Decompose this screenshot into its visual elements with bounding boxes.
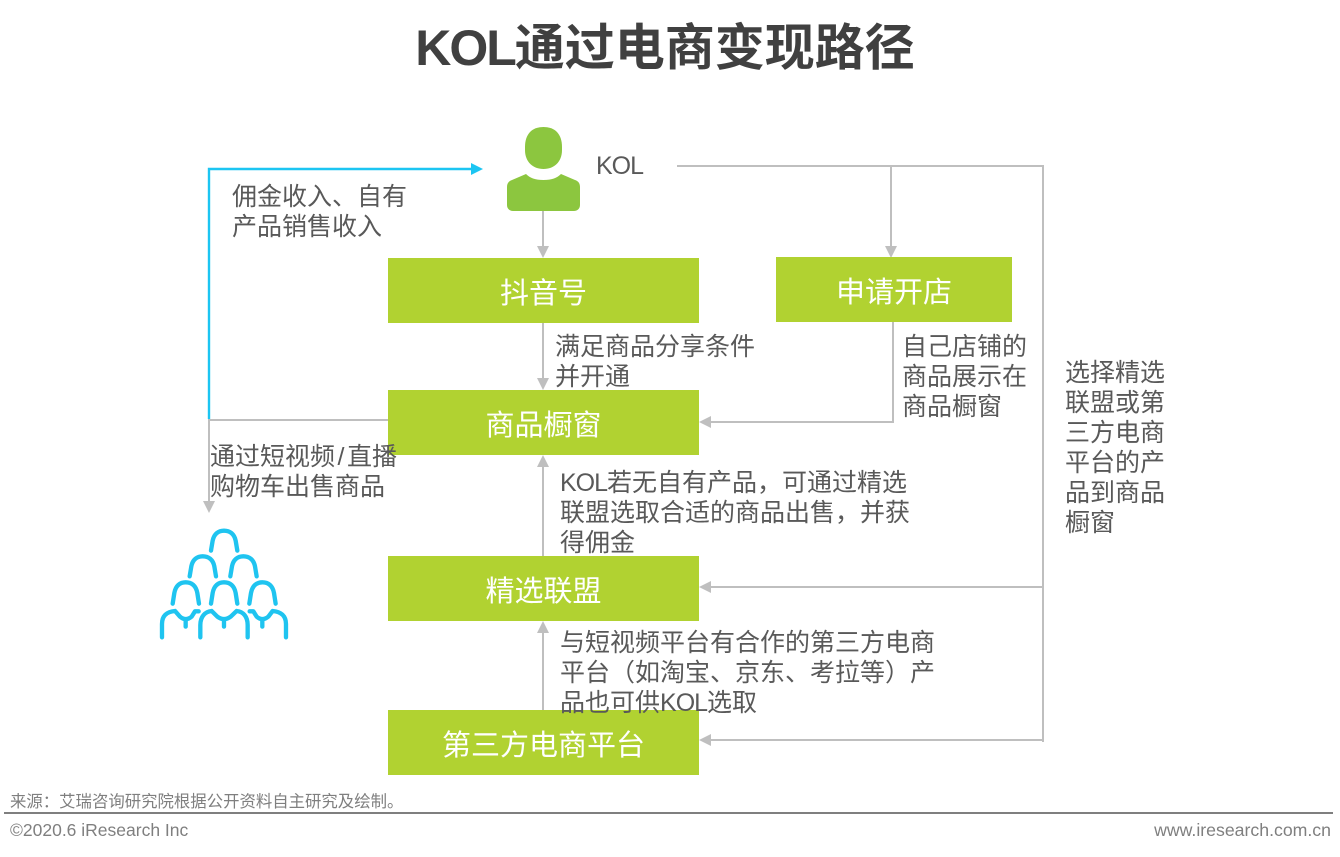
text: select alliance or third party: 三方电商 — [1065, 419, 1165, 447]
box: third-party e-commerce platform: 第三方电商平台 — [442, 730, 645, 762]
text: third-party platforms — [560, 629, 935, 717]
box: Douyin account — [388, 258, 699, 323]
text: select alliance or third party: 橱窗 — [1065, 509, 1115, 537]
text: meet sharing conditions: 满足商品分享条件 — [555, 333, 755, 361]
box: apply to open store: 申请开店 — [836, 277, 952, 309]
text: meet sharing conditions — [555, 333, 755, 391]
text: select alliance or third party — [1065, 359, 1165, 537]
text: commission income: 产品销售收入 — [232, 213, 382, 241]
box: product showcase — [388, 390, 699, 455]
text: third-party platforms: 与短视频平台有合作的第三方电商 — [560, 629, 935, 657]
text: commission income — [232, 183, 407, 241]
text: meet sharing conditions: 并开通 — [555, 363, 630, 391]
text: third-party platforms: 平台（如淘宝、京东、考拉等）产 — [560, 659, 935, 687]
text: sell via short video or live — [210, 443, 397, 501]
text: third-party platforms: 品也可供KOL选取 — [560, 689, 757, 717]
text: KOL without own products: KOL若无自有产品，可通过精选 — [560, 469, 907, 497]
title: KOL通过电商变现路径 — [415, 20, 915, 76]
text: sell via short video or live: 购物车出售商品 — [210, 473, 385, 501]
text: own store products: 商品橱窗 — [902, 393, 1002, 421]
text: select alliance or third party: 选择精选 — [1065, 359, 1165, 387]
box: selected alliance — [388, 556, 699, 621]
text: own store products: 商品展示在 — [902, 363, 1027, 391]
text: KOL without own products: 得佣金 — [560, 529, 635, 557]
box: product showcase: 商品橱窗 — [485, 410, 602, 442]
text: KOL without own products: 联盟选取合适的商品出售，并获 — [560, 499, 910, 527]
text: KOL without own products — [560, 469, 910, 557]
text: select alliance or third party: 联盟或第 — [1065, 389, 1165, 417]
label: KOL: KOL — [596, 152, 643, 180]
text: select alliance or third party: 平台的产 — [1065, 449, 1165, 477]
text: own store products: 自己店铺的 — [902, 333, 1027, 361]
box: selected alliance: 精选联盟 — [485, 576, 602, 608]
copyright: ©2020.6 iResearch Inc — [10, 820, 188, 840]
text: own store products — [902, 333, 1027, 421]
box: apply to open store — [776, 257, 1012, 322]
footer rule — [4, 812, 1333, 814]
box: Douyin account: 抖音号 — [500, 278, 587, 310]
box: third-party e-commerce platform — [388, 710, 699, 775]
text: select alliance or third party: 品到商品 — [1065, 479, 1165, 507]
text: commission income: 佣金收入、自有 — [232, 183, 407, 211]
source note: 来源：艾瑞咨询研究院根据公开资料自主研究及绘制。 — [10, 793, 403, 811]
website: www.iresearch.com.cn — [1154, 820, 1331, 840]
text: sell via short video or live: 通过短视频/直播 — [210, 443, 397, 471]
